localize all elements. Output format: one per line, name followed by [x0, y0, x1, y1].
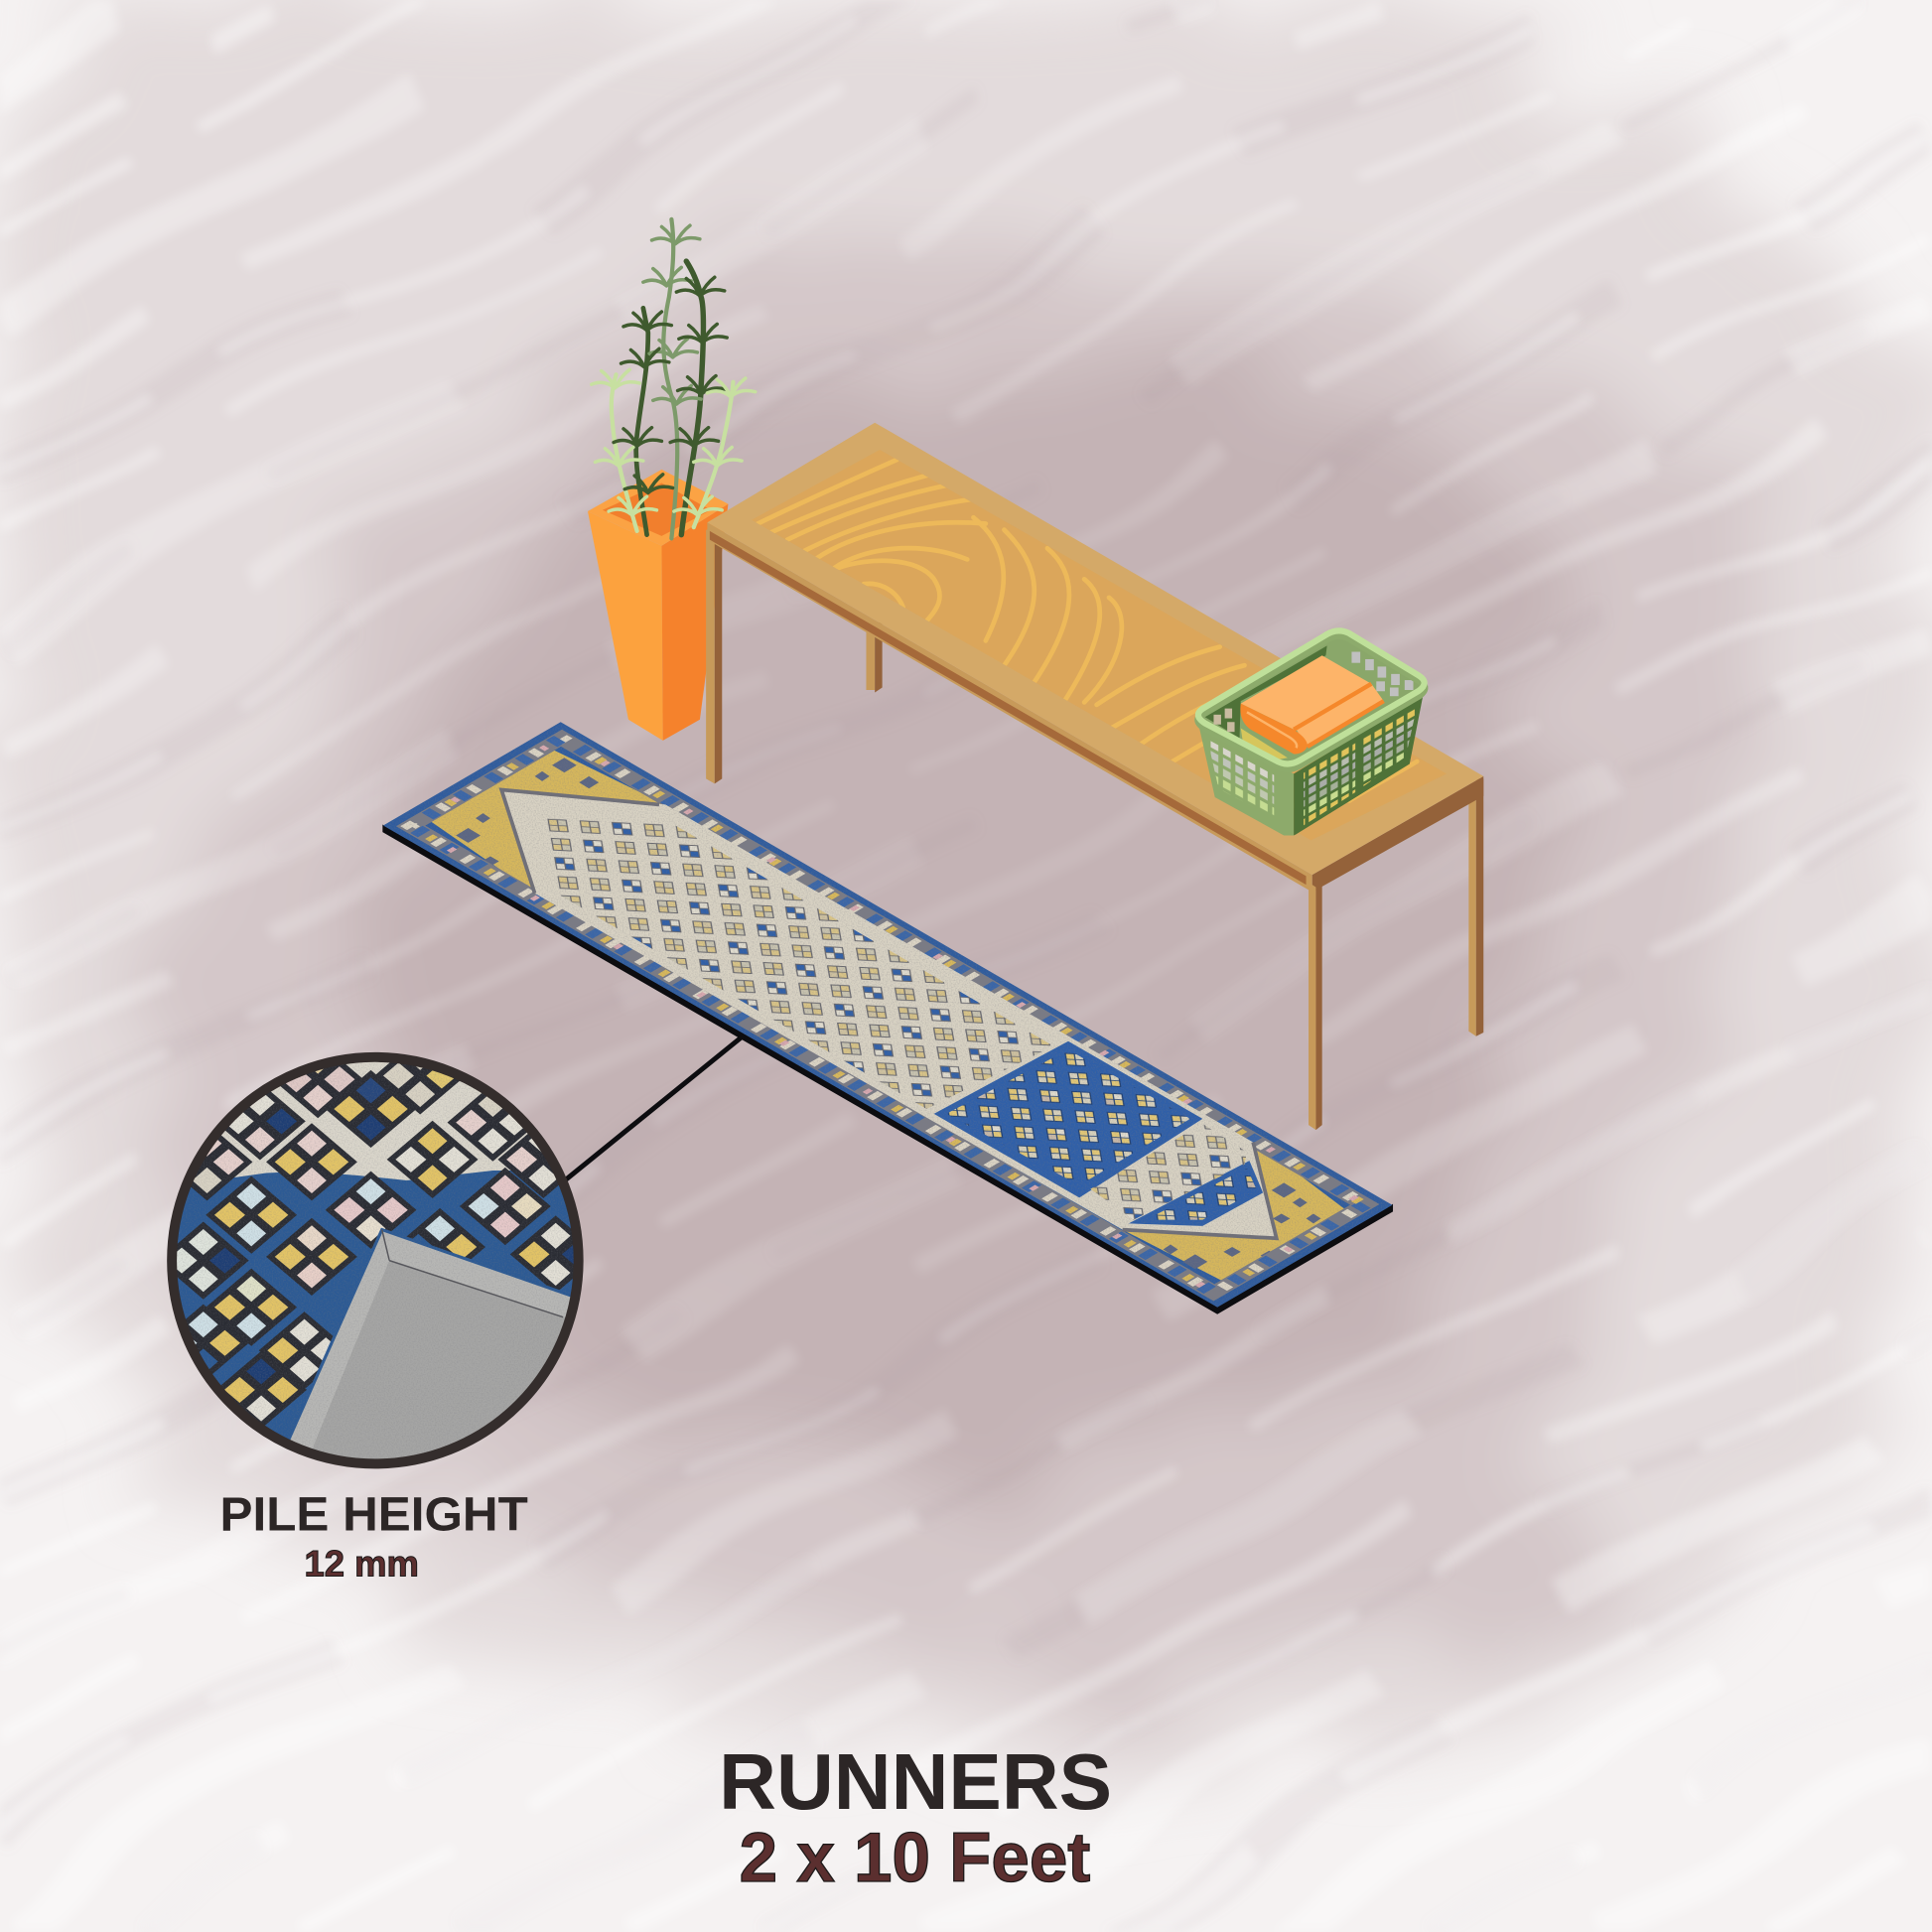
basket interior	[1198, 630, 1425, 763]
basket right face	[1294, 695, 1423, 835]
front left leg	[706, 530, 722, 783]
front leg	[1309, 883, 1322, 1130]
rug motifs on blue panel	[946, 1049, 1190, 1185]
towels	[1240, 655, 1384, 760]
table apron	[707, 522, 1483, 893]
rug motifs on small blue panel	[1146, 1169, 1257, 1220]
rug patterned border	[411, 738, 1365, 1293]
connector line from rug to zoom circle	[562, 1035, 745, 1182]
rug field	[501, 790, 1277, 1238]
back leg	[866, 622, 883, 692]
rug corner panels	[431, 751, 1344, 1280]
laundry basket with towels	[1198, 630, 1425, 835]
rug end chevrons	[501, 790, 1277, 1238]
plant stems and leaves	[592, 219, 756, 538]
basket left face	[1199, 726, 1294, 835]
zoom circle: pile detail	[158, 1036, 602, 1466]
rug motifs on second cream panel	[1090, 1124, 1247, 1220]
right leg	[1468, 778, 1483, 1036]
plant in orange pot	[588, 219, 756, 741]
circle frame	[172, 1057, 579, 1463]
label: pile height: PILE HEIGHT	[220, 1487, 528, 1541]
folded rug backing	[288, 1230, 592, 1466]
pot	[588, 470, 728, 741]
label: 12 mm: 12 mm	[305, 1542, 419, 1584]
basket rim	[1198, 630, 1425, 768]
subtitle: size: 2 x 10 Feet	[740, 1818, 1090, 1896]
runner rug	[383, 722, 1392, 1313]
table	[706, 423, 1483, 1130]
rug base	[383, 722, 1392, 1308]
rug pile texture	[383, 722, 1392, 1308]
rug blue panels	[934, 1041, 1263, 1226]
title: runners: RUNNERS	[719, 1737, 1112, 1826]
rug motifs on cream	[540, 815, 1053, 1109]
rug shadow edge	[383, 826, 1392, 1313]
table top	[707, 423, 1483, 875]
